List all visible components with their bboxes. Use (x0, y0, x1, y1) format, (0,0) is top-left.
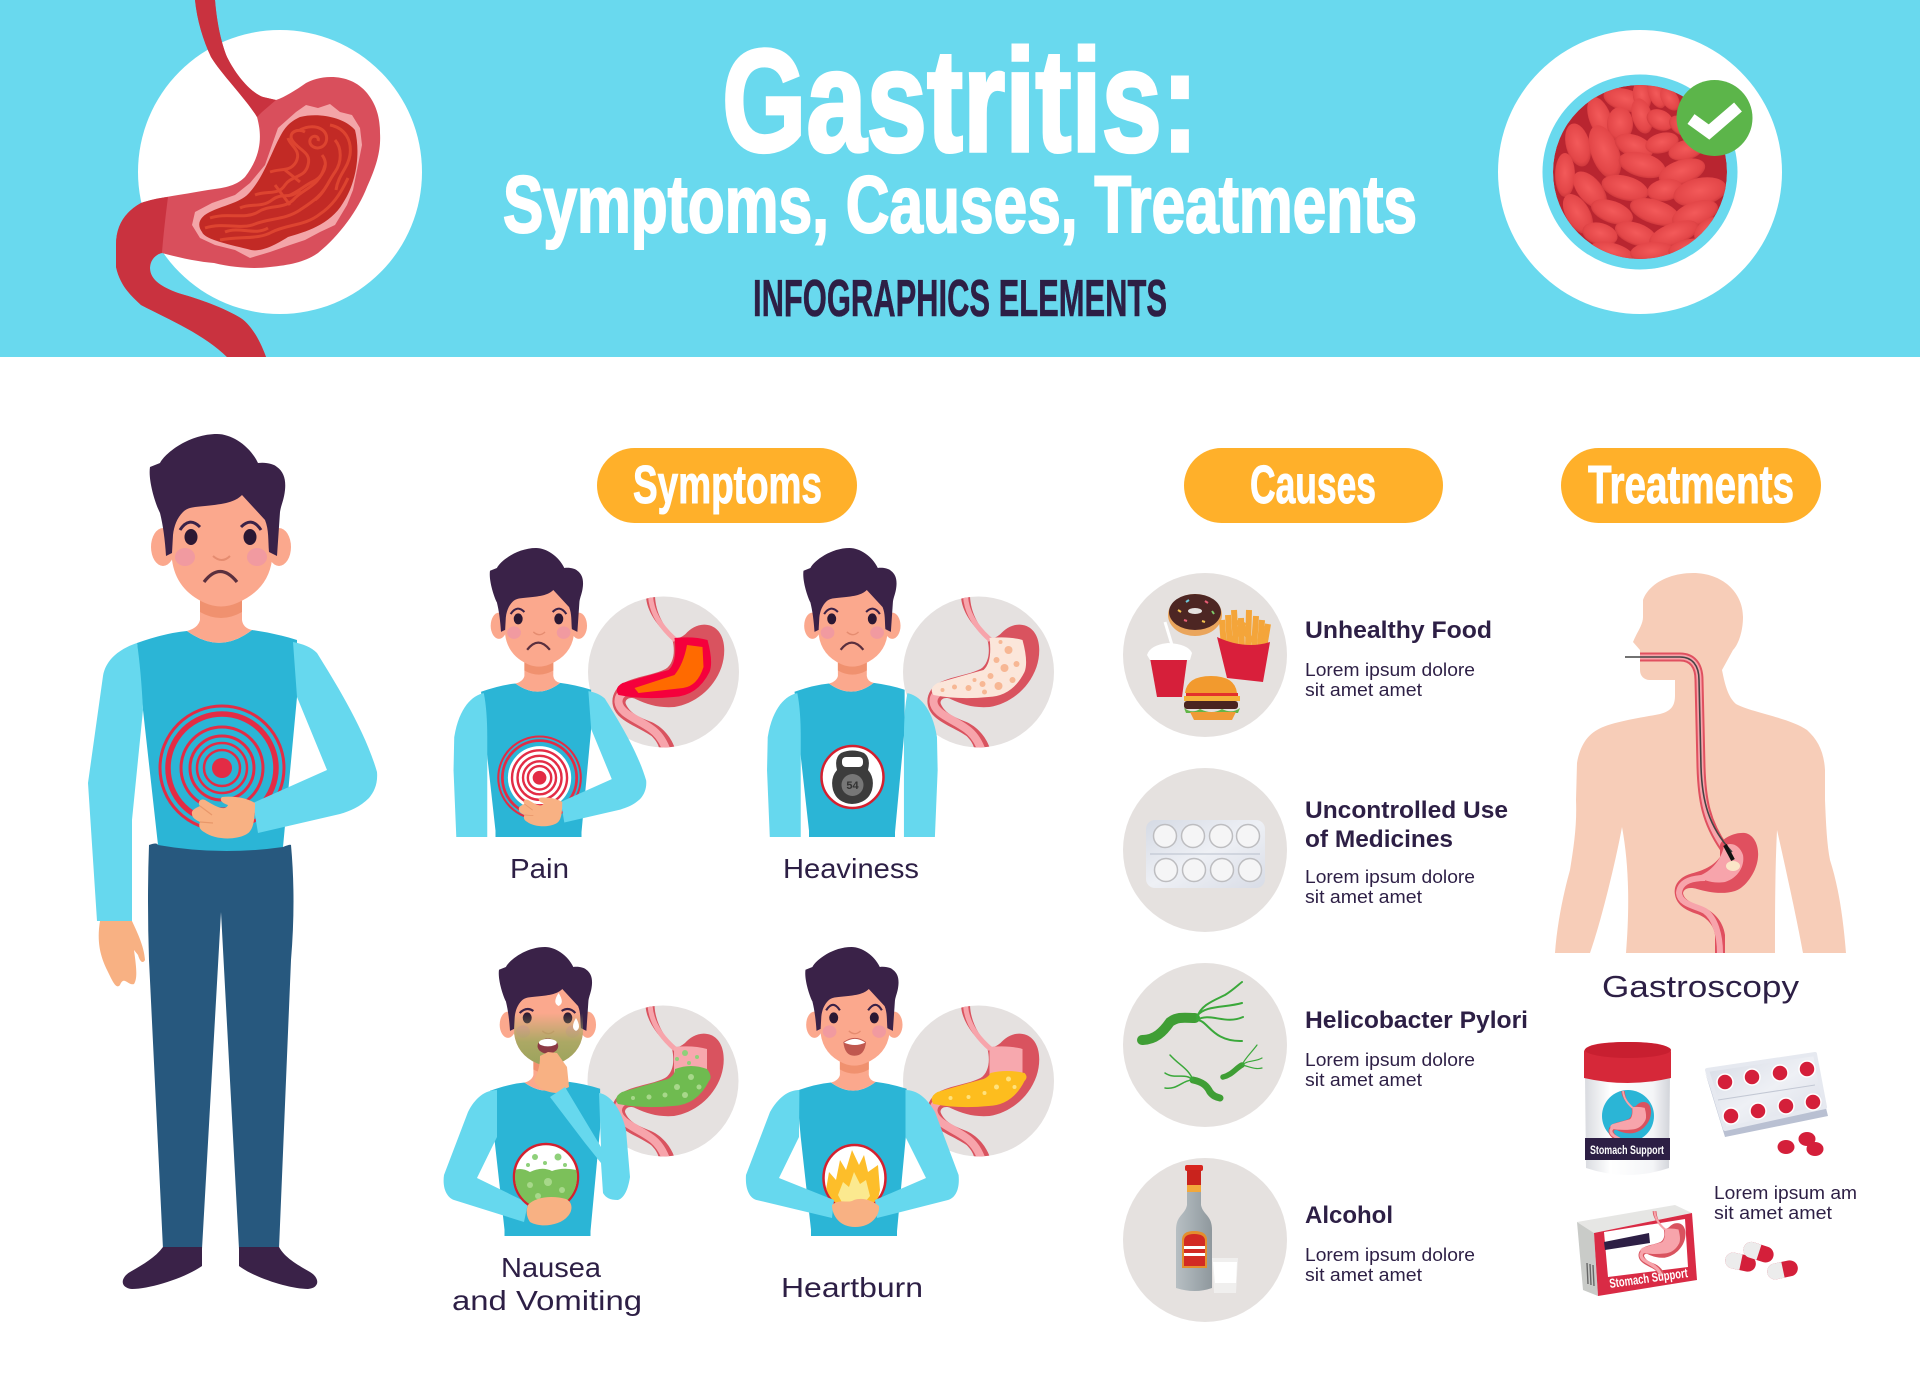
clasped hands (832, 1199, 879, 1227)
description: Lorem ipsum dolore (1305, 660, 1475, 680)
symptoms heading pill (597, 448, 857, 523)
treatment: red tablets blister (1705, 1054, 1828, 1156)
stomach inset (903, 596, 1054, 750)
label: Gastroscopy (1602, 969, 1800, 1004)
right arm (253, 642, 377, 833)
treatment: capsules (1724, 1240, 1799, 1281)
description: Lorem ipsum dolore (1305, 867, 1475, 887)
duodenum lumen (1679, 878, 1720, 953)
heading: Unhealthy Food (1305, 617, 1492, 644)
main character figure (88, 434, 377, 1289)
description (1305, 1245, 1475, 1285)
endoscope tip (1725, 845, 1733, 860)
description: sit amet amet (1305, 680, 1422, 700)
pain target (160, 706, 284, 830)
stomach inset (588, 596, 739, 750)
arms (746, 1090, 959, 1218)
stomach (1675, 833, 1758, 953)
head (150, 434, 291, 643)
hand on belly (527, 1197, 572, 1225)
hand on belly (192, 797, 255, 838)
sad face (180, 522, 261, 582)
icon: soda cup (1147, 622, 1192, 697)
right arm (550, 1087, 630, 1200)
bottle logo (1602, 1090, 1654, 1150)
blue ring (1542, 74, 1738, 270)
heading: Alcohol (1305, 1202, 1393, 1229)
description: sit amet amet (1305, 1070, 1422, 1090)
icon: fries (1217, 610, 1270, 682)
label: Heartburn (781, 1272, 923, 1303)
heading: of Medicines (1305, 826, 1453, 853)
icon: bacteria (1142, 982, 1262, 1098)
causes heading pill: Causes (1250, 455, 1376, 515)
description: sit amet amet (1305, 1265, 1422, 1285)
icon: burger (1184, 676, 1240, 720)
cause: unhealthy food (1123, 573, 1492, 737)
stomach lumen (1695, 844, 1743, 883)
kettlebell icon: 54 (846, 780, 859, 792)
illustration: cross-section of inflamed stomach (116, 0, 380, 357)
left arm (88, 643, 143, 921)
endoscope line (1625, 657, 1732, 852)
treatment: bottle of stomach support (1584, 1042, 1671, 1175)
stomach lining texture (1553, 79, 1729, 266)
symptom: nausea and vomiting: and Vomiting (452, 1285, 642, 1316)
hand at mouth (534, 1052, 569, 1093)
stomach inset (903, 1005, 1054, 1159)
left hand (99, 921, 145, 986)
heading: Helicobacter Pylori (1305, 1007, 1528, 1034)
treatment: medicine box (1577, 1205, 1697, 1296)
esophagus (1640, 657, 1724, 848)
cause: uncontrolled use of medicines (1123, 768, 1508, 932)
heading (1305, 797, 1508, 853)
cause: alcohol (1123, 1158, 1475, 1322)
treatment text: Lorem ipsum am (1714, 1183, 1857, 1203)
treatment: medicine box: Stomach Support (1608, 1265, 1689, 1291)
right white circle (1498, 30, 1782, 314)
description (1305, 1050, 1475, 1090)
left white circle (138, 30, 422, 314)
treatment: bottle of stomach support: Stomach Support (1590, 1143, 1664, 1157)
circle background (1123, 573, 1287, 737)
treatment text (1714, 1183, 1857, 1223)
treatments heading pill (1561, 448, 1821, 523)
description: sit amet amet (1305, 887, 1422, 907)
figure (490, 947, 600, 1237)
light (1726, 861, 1740, 871)
shoes (123, 1247, 317, 1289)
barcode (1587, 1263, 1594, 1286)
cause: helicobacter pylori (1123, 963, 1528, 1127)
icon: bottle and glass (1176, 1165, 1238, 1293)
title: Gastritis: (722, 19, 1198, 182)
label: Pain (510, 853, 569, 884)
figure (797, 947, 907, 1237)
pants (148, 844, 294, 1249)
belly circle with flames (824, 1145, 886, 1212)
treatments heading pill: Treatments (1588, 455, 1794, 515)
header banner (0, 0, 1920, 357)
heading: Uncontrolled Use (1305, 797, 1508, 824)
figure (454, 548, 646, 838)
symptom: heartburn (746, 947, 1054, 1303)
label: Heaviness (783, 853, 919, 884)
loose tablets (1778, 1132, 1824, 1156)
body silhouette (1555, 573, 1846, 953)
description: Lorem ipsum dolore (1305, 1050, 1475, 1070)
icon: donut (1168, 594, 1222, 636)
treatment text: sit amet amet (1714, 1203, 1832, 1223)
treatment: gastroscopy diagram (1555, 573, 1846, 1004)
box logo (1639, 1211, 1686, 1276)
description (1305, 867, 1475, 907)
symptom: pain (454, 548, 739, 884)
stomach inset (588, 1005, 738, 1159)
symptoms heading pill: Symptoms (633, 455, 822, 515)
tagline: INFOGRAPHICS ELEMENTS (753, 270, 1167, 328)
icon: green check badge (1676, 80, 1752, 156)
figure (767, 548, 938, 838)
symptom: nausea and vomiting (444, 947, 738, 1316)
left arm (444, 1090, 528, 1222)
symptom: heaviness (767, 548, 1054, 884)
subtitle: Symptoms, Causes, Treatments (503, 160, 1417, 250)
kettlebell icon (822, 746, 884, 808)
description (1305, 660, 1475, 700)
torso (137, 630, 297, 856)
circle background (1123, 963, 1287, 1127)
belly circle with green acid (512, 1142, 580, 1206)
description: Lorem ipsum dolore (1305, 1245, 1475, 1265)
icon: pill blister (1146, 820, 1265, 888)
label: Nausea (501, 1252, 601, 1283)
causes heading pill (1184, 448, 1443, 523)
circle background (1123, 1158, 1287, 1322)
sweat drops (555, 993, 579, 1031)
circle background (1123, 768, 1287, 932)
